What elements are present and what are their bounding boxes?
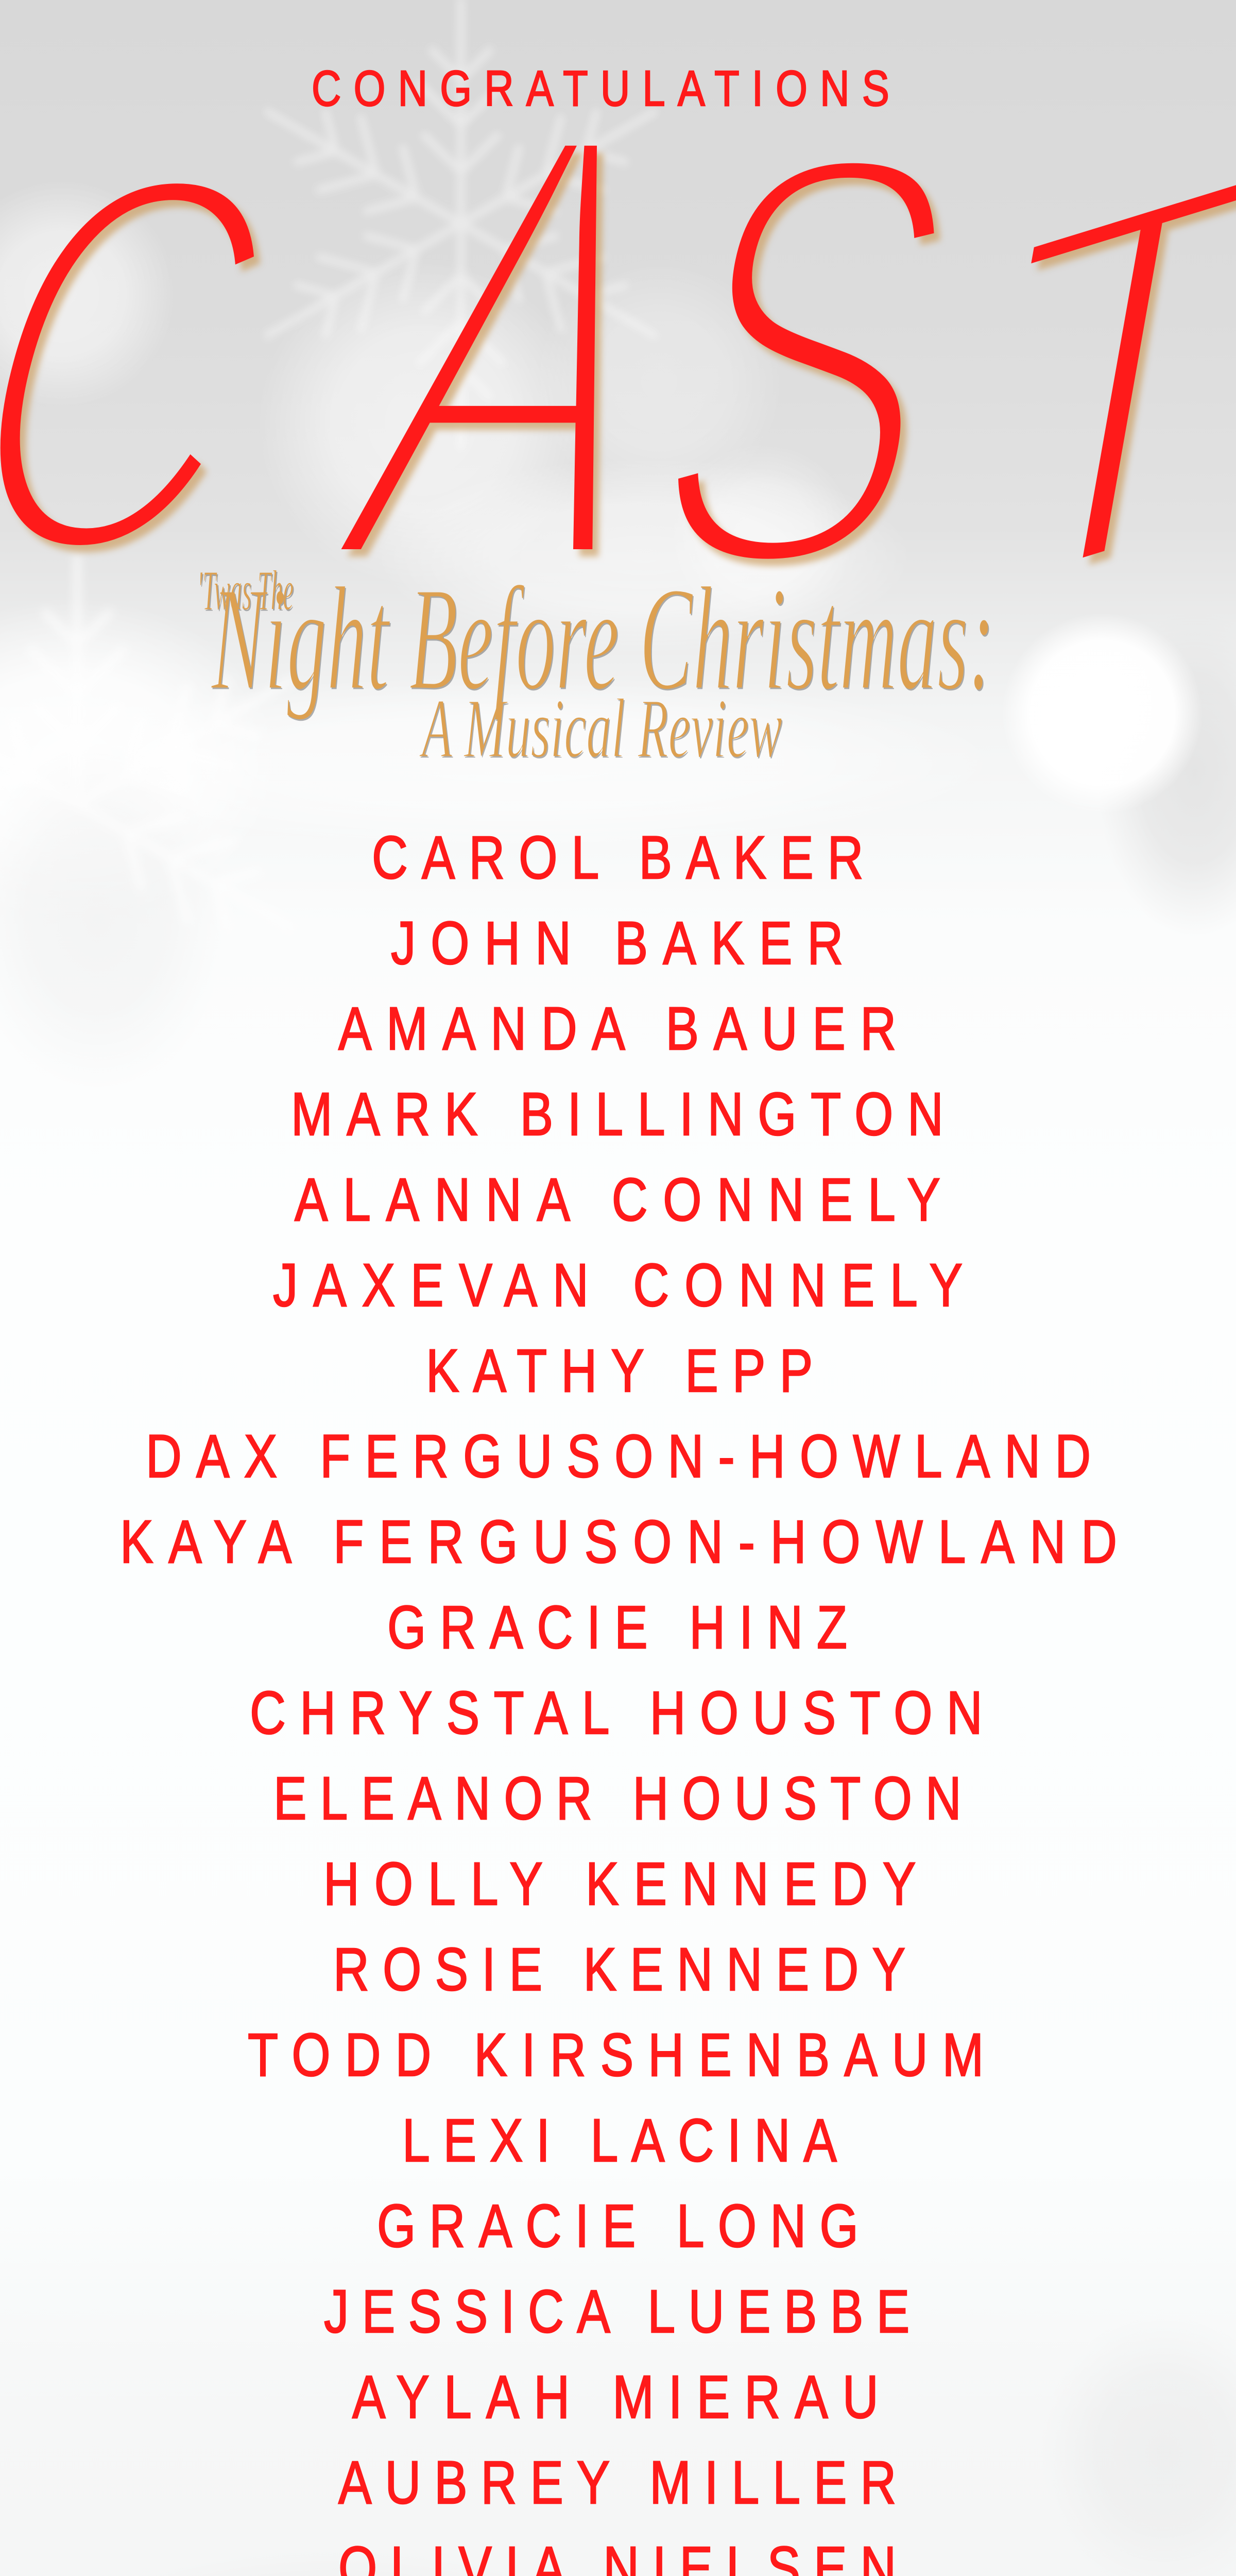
show title logo: 'Twas The	[197, 559, 294, 622]
name: ROSIE KENNEDY	[333, 1935, 905, 2003]
title line: A Musical Review: A Musical Review	[419, 681, 782, 775]
name: DAX FERGUSON-HOWLAND	[146, 1422, 1091, 1490]
name: GRACIE LONG	[377, 2192, 859, 2260]
name: AYLAH MIERAU	[352, 2363, 879, 2431]
name: ALANNA CONNELY	[295, 1165, 940, 1233]
name: JOHN BAKER	[391, 909, 843, 977]
name: CAROL BAKER	[372, 823, 863, 891]
name: KAYA FERGUSON-HOWLAND	[120, 1507, 1117, 1575]
name: MARK BILLINGTON	[291, 1080, 943, 1148]
letter S: S	[603, 26, 1016, 693]
name: JESSICA LUEBBE	[324, 2277, 909, 2345]
name: LEXI LACINA	[402, 2106, 837, 2174]
name: AMANDA BAUER	[338, 994, 896, 1062]
name: GRACIE HINZ	[387, 1593, 847, 1661]
name: AUBREY MILLER	[338, 2448, 896, 2516]
cast list	[120, 823, 1117, 2576]
name: JAXEVAN CONNELY	[273, 1251, 963, 1319]
heading: congratulations: CONGRATULATIONS	[312, 61, 889, 116]
name: TODD KIRSHENBAUM	[248, 2021, 984, 2089]
name: CHRYSTAL HOUSTON	[250, 1679, 983, 1747]
name: KATHY EPP	[426, 1336, 813, 1404]
name: ELEANOR HOUSTON	[273, 1764, 962, 1832]
decorative snowflake: top centre	[243, 0, 679, 450]
show title logo	[200, 570, 989, 758]
decorative snowflake: left	[0, 554, 317, 970]
title: CAST	[0, 145, 1236, 570]
name: HOLLY KENNEDY	[323, 1850, 916, 1918]
letter A: A	[284, 0, 765, 697]
